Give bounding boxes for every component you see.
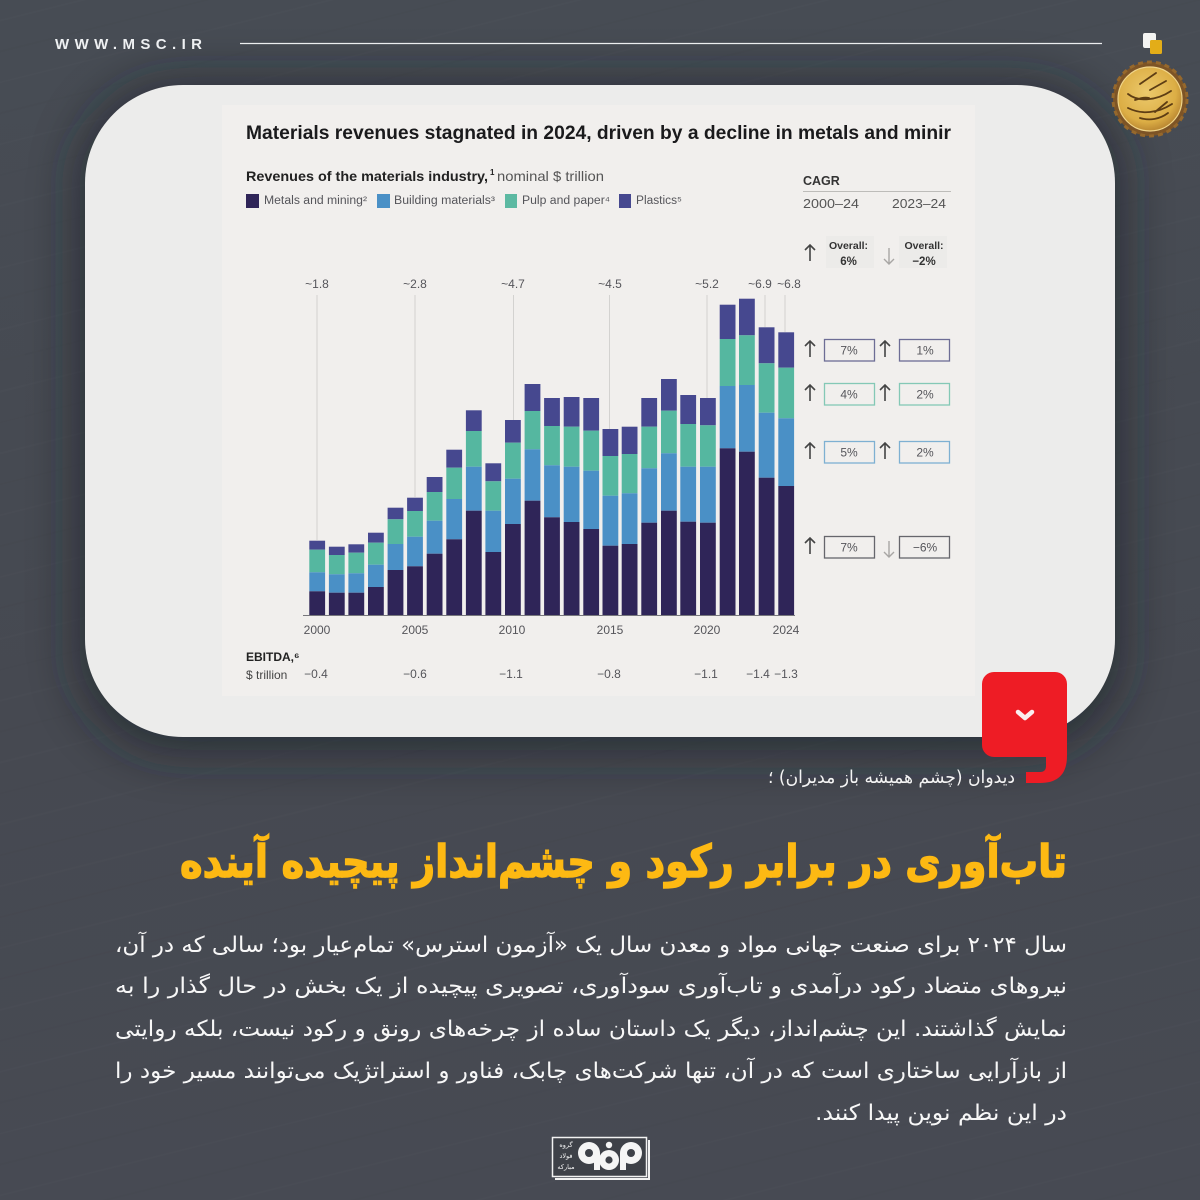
CAGR row: metals and mining: 7%: [840, 540, 858, 554]
icon: gold seal: [1113, 62, 1187, 136]
CAGR row: metals and mining: −6%: [913, 540, 938, 554]
EBITDA row: −1.1: [694, 667, 718, 681]
year axis labels: 2005: [402, 623, 429, 637]
CAGR header: 2000–24: [803, 196, 859, 211]
CAGR overall row: −2%: [912, 256, 936, 268]
website address: WWW.MSC.IR: [55, 36, 202, 53]
chart subtitle: nominal $ trillion: [497, 168, 604, 184]
EBITDA row: $ trillion: [246, 668, 287, 682]
CAGR overall row: 6%: [840, 256, 857, 268]
year axis labels: 2020: [694, 623, 721, 637]
body paragraph: در این نظم نوین پیدا کنند.: [815, 1101, 1067, 1126]
total revenue labels with leader lines: ~6.9: [748, 277, 772, 291]
CAGR row: pulp and paper: [805, 384, 950, 405]
legend: Plastics⁵: [636, 195, 682, 207]
chart subtitle: [246, 168, 604, 184]
logo: Mobarakeh Steel Group: مبارکه: [557, 1163, 575, 1171]
body paragraph: [115, 931, 1067, 1126]
caption: دیدوان (چشم همیشه باز مدیران) ؛: [768, 768, 1015, 788]
EBITDA row: [246, 650, 798, 682]
EBITDA row: −0.4: [304, 667, 328, 681]
legend: Metals and mining²: [264, 195, 367, 207]
EBITDA row: −0.6: [403, 667, 427, 681]
chart subtitle: 1: [490, 168, 495, 177]
CAGR overall row: Overall:: [829, 240, 868, 252]
body paragraph: سال ۲۰۲۴ برای صنعت جهانی مواد و معدن سال یک «آزمون استرس» تمام‌عیار بود؛ سالی که در آن،: [115, 931, 1067, 958]
icon: small copy mark: [1143, 33, 1162, 54]
CAGR row: metals and mining: [805, 536, 950, 558]
CAGR header: [803, 174, 951, 211]
CAGR row: plastics: [805, 340, 950, 361]
CAGR row: pulp and paper: 4%: [840, 388, 858, 402]
total revenue labels with leader lines: ~5.2: [695, 277, 719, 291]
body paragraph: نیروهای متضاد رکود درآمدی و تاب‌آوری سودآوری، تصویری پیچیده از یک بخش در حال گذار را به: [115, 972, 1067, 999]
logo: Mobarakeh Steel Group: [552, 1138, 649, 1179]
chart subtitle: Revenues of the materials industry,: [246, 168, 488, 184]
panel shadow: [80, 85, 1120, 750]
CAGR row: pulp and paper: 2%: [916, 388, 934, 402]
EBITDA row: −1.1: [499, 667, 523, 681]
CAGR row: plastics: 1%: [916, 344, 934, 358]
CAGR row: building materials: [805, 442, 950, 463]
total revenue labels with leader lines: ~4.7: [501, 277, 525, 291]
EBITDA row: −0.8: [597, 667, 621, 681]
icon: red vav badge with chevron: [982, 672, 1067, 783]
year axis labels: 2024: [773, 623, 800, 637]
legend: Building materials³: [394, 195, 495, 207]
logo: Mobarakeh Steel Group: گروه: [559, 1141, 574, 1149]
year axis labels: 2010: [499, 623, 526, 637]
CAGR overall row: [805, 236, 947, 268]
EBITDA row: −1.4: [746, 667, 770, 681]
total revenue labels with leader lines: ~4.5: [598, 277, 622, 291]
CAGR overall row: Overall:: [904, 240, 944, 252]
CAGR row: building materials: 2%: [916, 446, 934, 460]
chart title: Materials revenues stagnated in 2024, driven by a decline in metals and minir: [246, 123, 952, 144]
CAGR header: CAGR: [803, 174, 840, 188]
logo: Mobarakeh Steel Group: فولاد: [559, 1152, 573, 1160]
legend: [246, 194, 682, 208]
stacked bar chart: [303, 299, 795, 616]
year axis labels: 2015: [597, 623, 624, 637]
year axis labels: [304, 623, 800, 637]
CAGR header: 2023–24: [892, 196, 946, 211]
panel: chart card: [85, 85, 1115, 737]
header rule: [240, 42, 1102, 44]
EBITDA row: EBITDA,⁶: [246, 650, 300, 664]
main heading: تاب‌آوری در برابر رکود و چشم‌انداز پیچیده آینده: [180, 834, 1067, 888]
year axis labels: 2000: [304, 623, 331, 637]
body paragraph: از بازآرایی ساختاری است که در آن، تنها شرکت‌های چابک، فناور و استراتژیک می‌توانند مسیر خود را: [115, 1057, 1067, 1084]
legend: Pulp and paper⁴: [522, 195, 610, 207]
CAGR row: plastics: 7%: [840, 344, 858, 358]
CAGR row: building materials: 5%: [840, 446, 858, 460]
total revenue labels with leader lines: ~6.8: [777, 277, 801, 291]
total revenue labels with leader lines: ~1.8: [305, 277, 329, 291]
total revenue labels with leader lines: ~2.8: [403, 277, 427, 291]
total revenue labels with leader lines: [305, 277, 801, 540]
body paragraph: نمایش گذاشتند. این چشم‌انداز، دیگر یک داستان ساده از چرخه‌های رونق و رکود نیست، بلکه روایتی: [115, 1016, 1067, 1042]
EBITDA row: −1.3: [774, 667, 798, 681]
